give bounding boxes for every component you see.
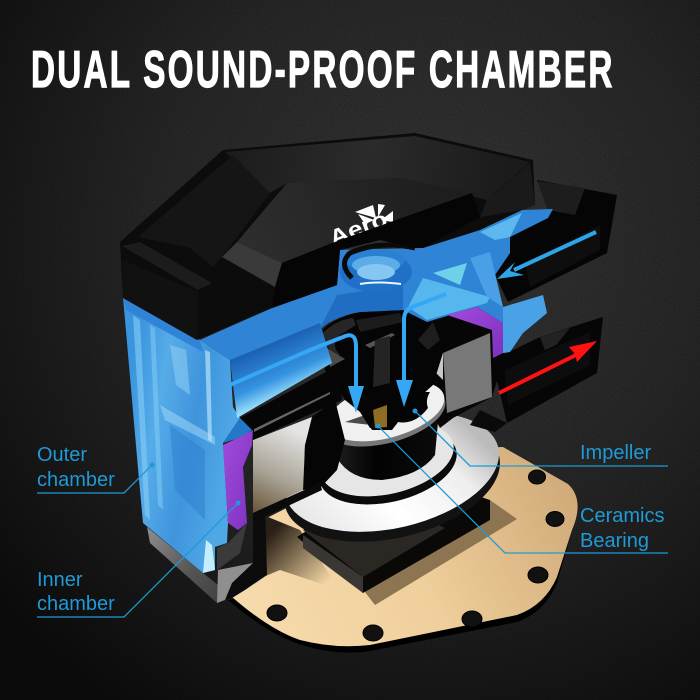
mounting holes (267, 470, 564, 641)
right inner panel (420, 303, 505, 428)
callout: inner chamber: chamber (37, 593, 115, 615)
lower white disk (272, 393, 512, 561)
base plate (228, 447, 578, 653)
left top recess (138, 155, 270, 267)
middle disk (312, 410, 464, 517)
light blue inner chamber highlight (408, 213, 547, 353)
blue flow arrow: right channel (396, 294, 446, 407)
callout: outer chamber: chamber (37, 469, 115, 491)
title: DUAL SOUND-PROOF CHAMBER (31, 41, 615, 99)
right purple seal (447, 307, 503, 358)
callout: ceramics bearing: Ceramics (580, 505, 664, 527)
callout: impeller: Impeller (580, 442, 651, 464)
black struts around left panel (240, 366, 345, 522)
impeller ring (320, 369, 452, 458)
cooler cutaway illustration (120, 133, 617, 653)
blue top band (200, 209, 553, 360)
callout: ceramics bearing (376, 424, 668, 553)
lower housing base (147, 430, 267, 603)
callout: inner chamber: Inner (37, 569, 83, 591)
blue outer chamber wall (123, 297, 240, 573)
black top shell (120, 133, 535, 340)
callout: outer chamber: Outer (37, 444, 87, 466)
blue window (230, 323, 332, 418)
heatsink fins block (297, 470, 517, 605)
callout: inner chamber (37, 500, 240, 617)
threaded port (340, 245, 415, 292)
central cylinder (330, 400, 440, 480)
intake arrow (497, 232, 596, 279)
outlet red arrow (499, 341, 597, 393)
shaded blue under port (320, 285, 403, 328)
left inner panel (253, 417, 312, 513)
callout: ceramics bearing: Bearing (580, 530, 649, 552)
raised logo plate (237, 178, 472, 263)
logo (334, 204, 393, 242)
logo: Aero (326, 206, 391, 251)
blue flow arrow: left channel (230, 335, 364, 413)
left purple seal (223, 430, 253, 530)
lower outlet duct (470, 317, 603, 432)
callout: impeller (412, 408, 668, 466)
upper intake duct (495, 180, 617, 302)
hub with spokes (318, 308, 447, 428)
gold bearing (373, 405, 387, 428)
blue strut at seal (223, 418, 252, 443)
callout: outer chamber (37, 444, 154, 493)
right column (480, 163, 535, 217)
